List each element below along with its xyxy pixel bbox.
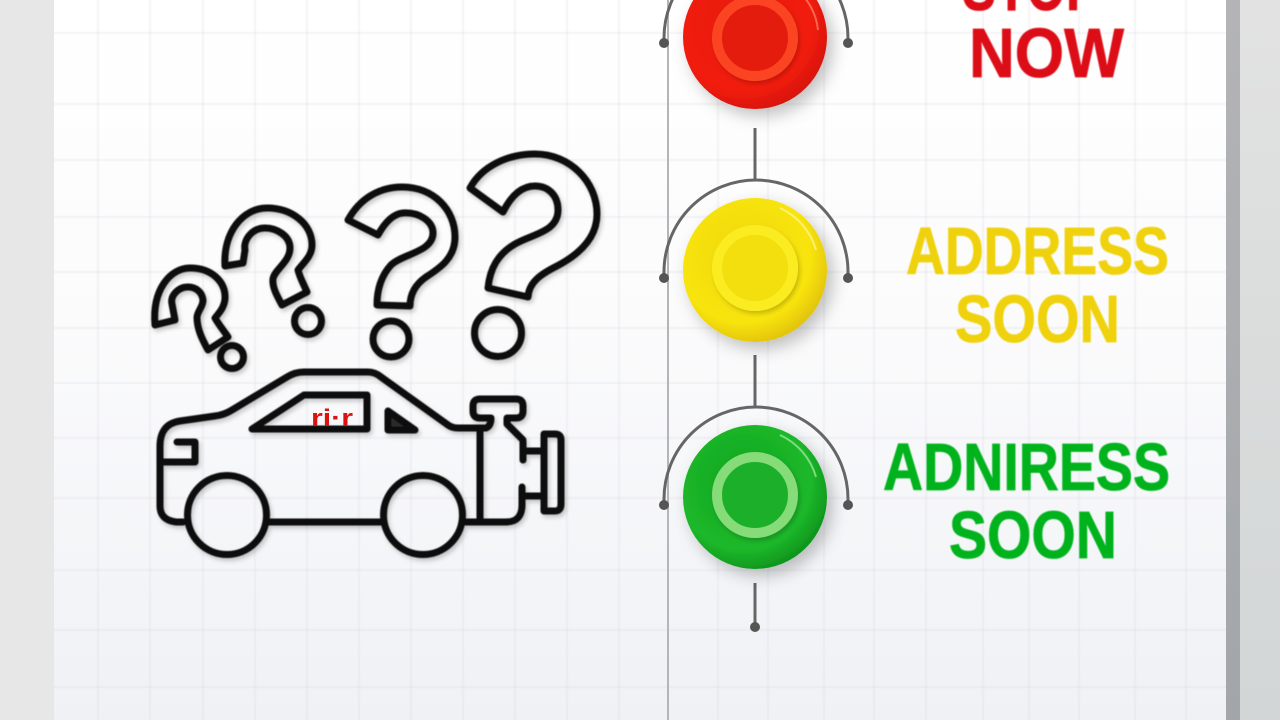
icon: question mark 4 — [470, 154, 597, 356]
label: adniress soon — [883, 430, 1170, 573]
icon: car with question marks — [155, 154, 597, 554]
label: adniress soon: SOON — [949, 498, 1117, 573]
connector lines — [754, 128, 756, 627]
icon: engine — [473, 399, 561, 522]
label: stop now: NOW — [969, 14, 1124, 92]
button: green — [683, 425, 827, 569]
icon: headlight — [162, 442, 195, 462]
button: yellow — [683, 198, 827, 342]
icon: car body — [160, 372, 483, 554]
vertical divider line — [667, 0, 669, 720]
background: right margin — [1240, 0, 1280, 720]
icon: side window — [252, 395, 367, 429]
window text: ri·r — [311, 405, 353, 432]
arc: red button — [659, 0, 853, 48]
background: left margin — [0, 0, 54, 720]
panel edge strip — [1226, 0, 1240, 720]
arc: green button — [659, 407, 853, 510]
icon: question mark 1 — [155, 268, 244, 368]
button: red — [683, 0, 827, 109]
label: address soon — [906, 214, 1169, 357]
label: address soon: SOON — [955, 282, 1120, 357]
label: address soon: ADDRESS — [906, 214, 1169, 289]
icon: rear wheel — [384, 476, 462, 554]
label: adniress soon: ADNIRESS — [883, 430, 1170, 505]
icon: question mark 2 — [225, 208, 322, 334]
icon: question mark 3 — [348, 187, 455, 357]
arc: yellow button — [659, 180, 853, 283]
icon: quarter window — [388, 411, 415, 430]
connector end dot — [750, 622, 760, 632]
icon: front wheel — [188, 476, 266, 554]
